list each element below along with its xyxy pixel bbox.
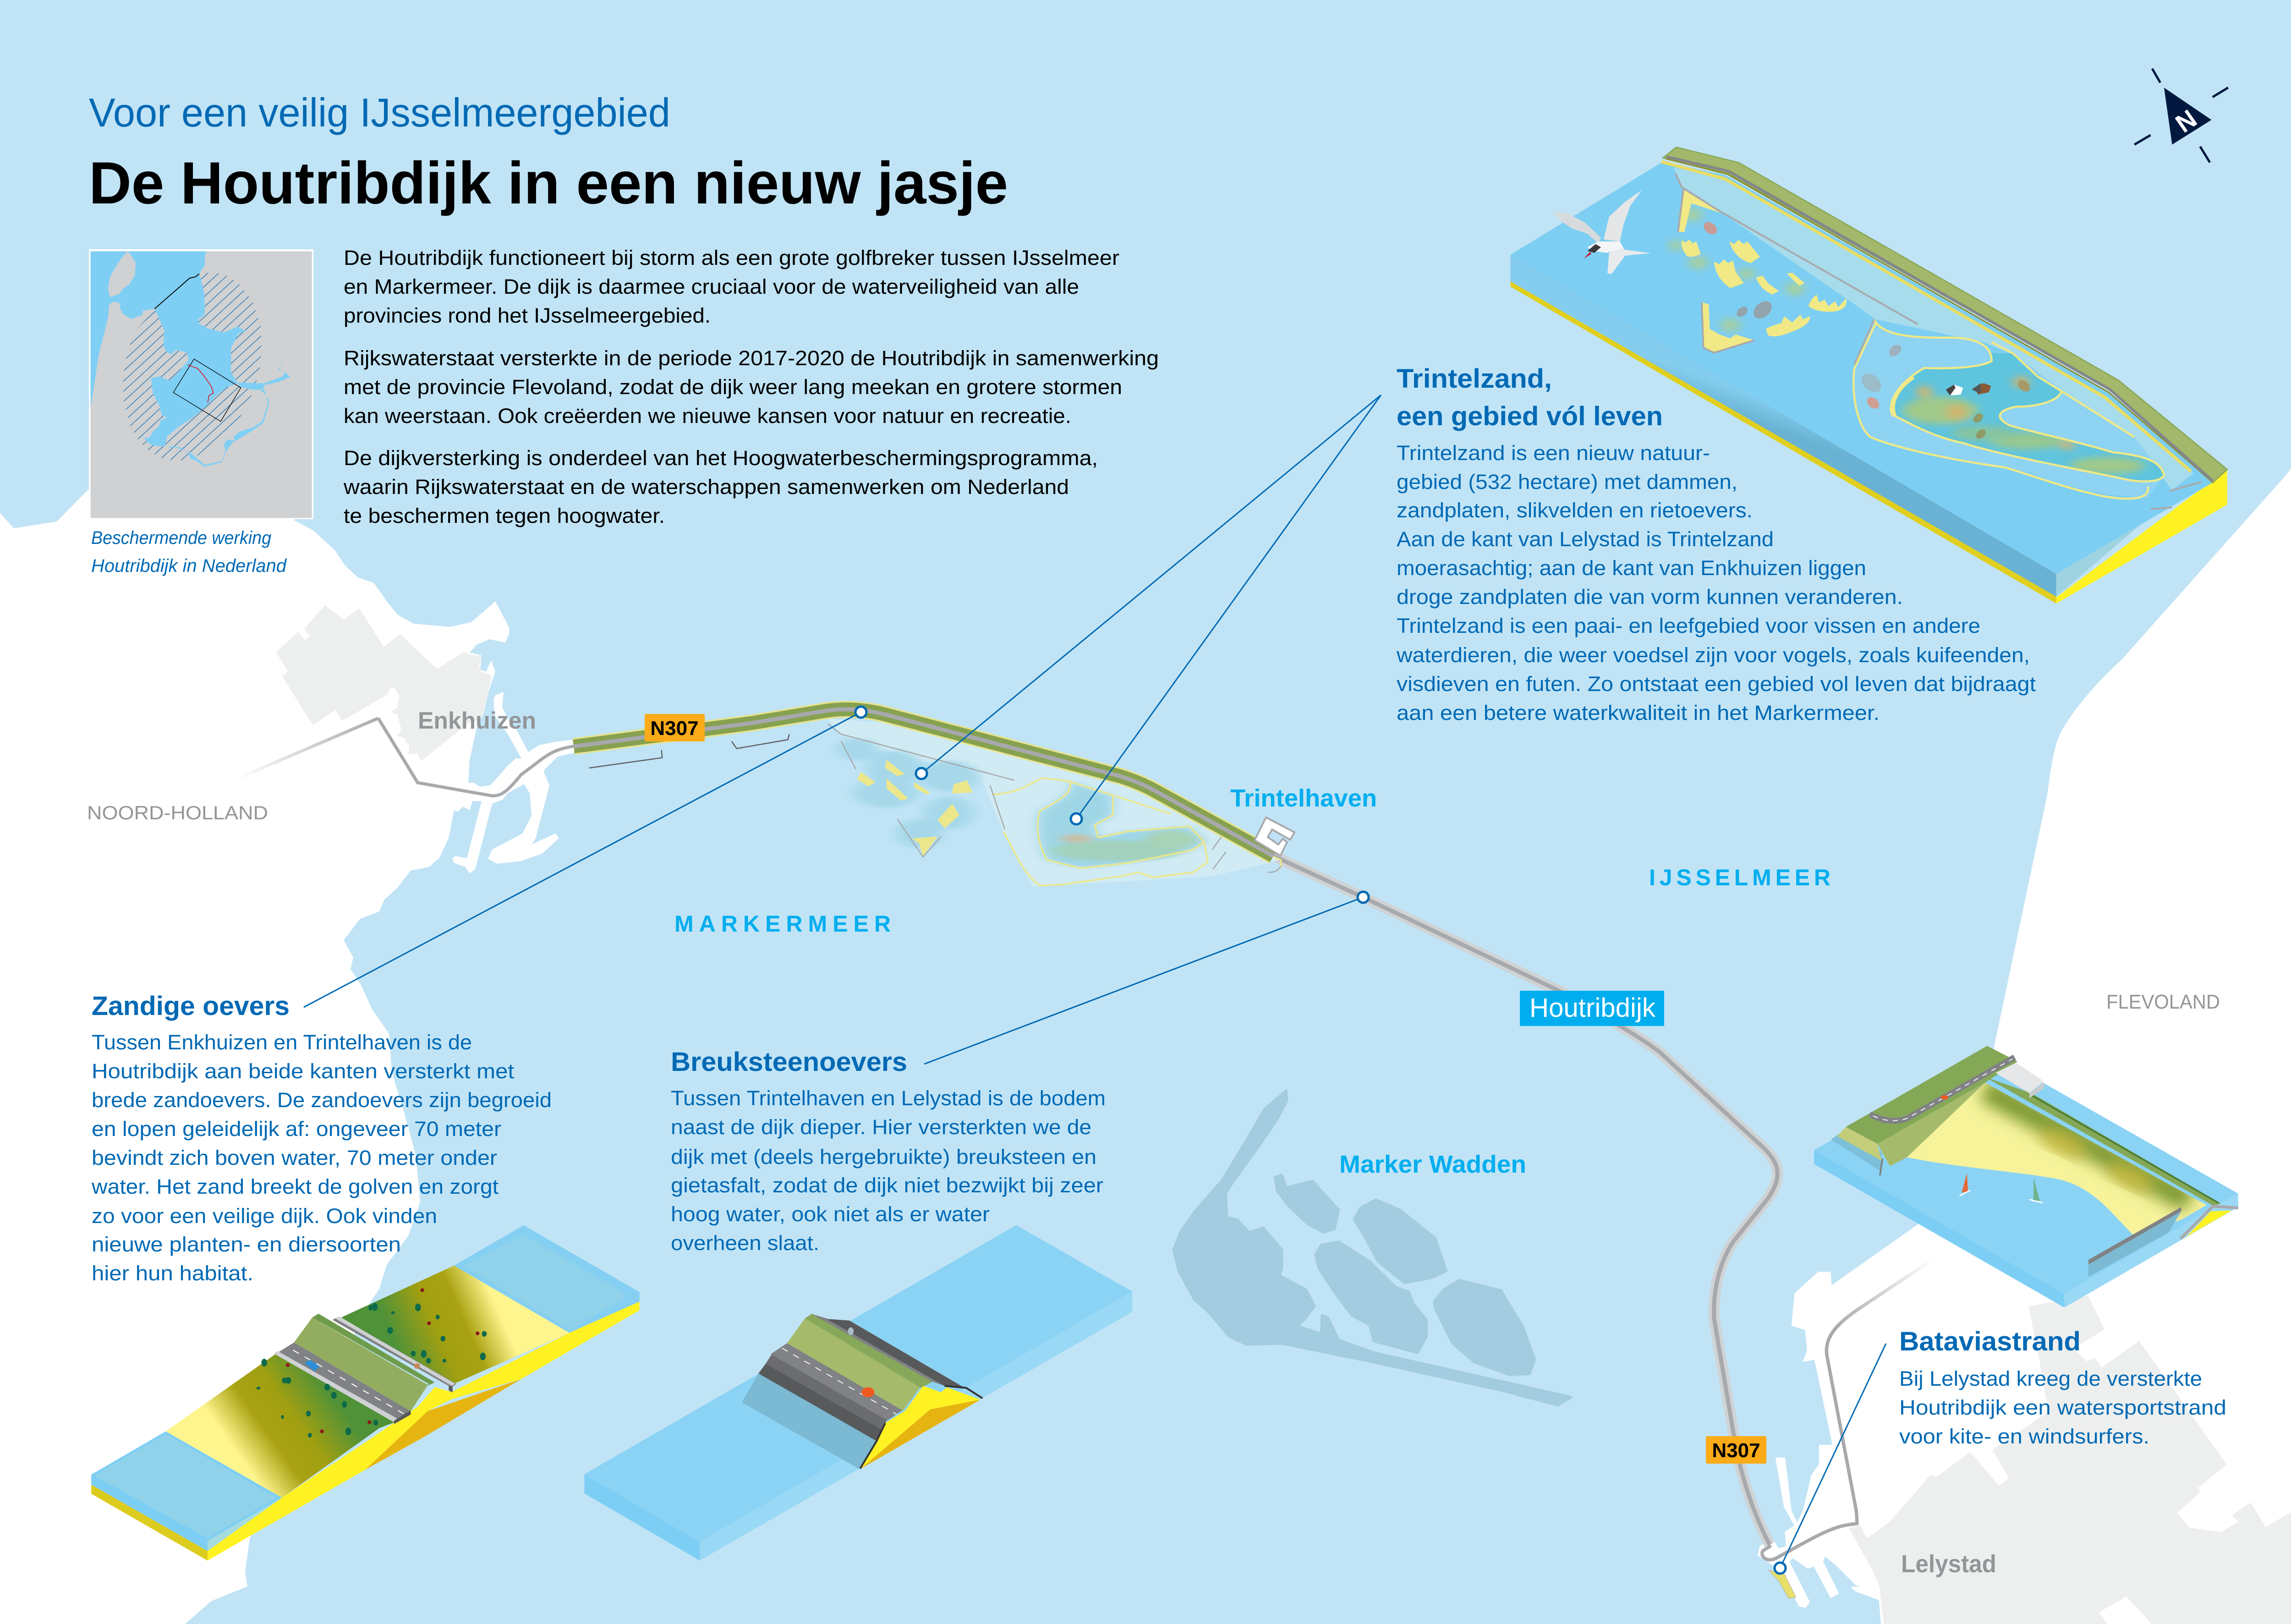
panel: Zandige oevers text: nieuwe planten- en diersoorten [92, 1233, 401, 1256]
inset hatching [123, 273, 262, 460]
label: Markermeer: MARKERMEER [674, 911, 891, 937]
panel: Breuksteenoevers text: overheen slaat. [671, 1231, 819, 1255]
intro text: De Houtribdijk functioneert bij storm als een grote golfbreker tussen IJsselmeer [344, 246, 1119, 269]
dike [1663, 147, 2227, 483]
label: Houtribdijk: Houtribdijk [1529, 993, 1656, 1023]
pale shallow zone [1674, 167, 2194, 490]
cyclist [848, 1328, 854, 1335]
end cut [1880, 1158, 2238, 1239]
intro text: waarin Rijkswaterstaat en de waterschappen samenwerken om Nederland [343, 475, 1069, 499]
map: Houtribdijk road [574, 709, 1777, 1545]
panel: Breuksteenoevers text: gietasfalt, zodat de dijk niet bezwijkt bij zeer [671, 1174, 1103, 1197]
underwater patches [1669, 208, 1805, 332]
beach: Bataviastrand on map [1769, 1570, 1796, 1598]
land: Noord-Holland [0, 458, 574, 1624]
dike [1837, 1046, 2221, 1205]
intro text: De dijkversterking is onderdeel van het Hoogwaterbeschermingsprogramma, [344, 446, 1098, 470]
far road [812, 1314, 945, 1386]
panel: Breuksteenoevers text [671, 1047, 1106, 1255]
panel: Breuksteenoevers text: hoog water, ook niet als er water [671, 1202, 990, 1226]
sand islands [1678, 189, 1847, 353]
panel: Zandige oevers text: water. Het zand breekt de golven en zorgt [91, 1175, 499, 1198]
dams and sand banks [1853, 319, 2164, 499]
leader lines [304, 395, 1886, 1568]
panel: Trintelzand text: Trintelzand, [1397, 364, 1552, 394]
panel: Zandige oevers text: zo voor een veilige dijk. Ook vinden [92, 1204, 437, 1228]
Trintelzand mini map [589, 719, 1281, 887]
label: Lelystad: Lelystad [1901, 1550, 1996, 1578]
map: Trintelhaven harbour [1255, 817, 1294, 856]
water slab [1814, 1051, 2238, 1307]
panel: Trintelzand text: een gebied vól leven [1397, 401, 1663, 431]
panel: Zandige oevers text: brede zandoevers. De zandoevers zijn begroeid [92, 1088, 552, 1112]
rock revetment [758, 1353, 888, 1441]
shrubs [257, 1303, 487, 1437]
panel: Breuksteenoevers text: naast de dijk dieper. Hier versterkten we de [671, 1115, 1091, 1139]
panel: Trintelzand text: zandplaten, slikvelden en rietoevers. [1397, 499, 1753, 522]
subtitle: Voor een veilig IJsselmeergebied [89, 90, 670, 135]
panel: Bataviastrand text: Bij Lelystad kreeg de versterkte [1899, 1367, 2202, 1390]
car [861, 1387, 874, 1397]
parking area [1995, 1063, 2044, 1098]
panel: Bataviastrand block diagram [1814, 1046, 2238, 1307]
land: Flevoland [1919, 433, 2291, 1224]
car [305, 1360, 319, 1372]
label: N307 bottom [1706, 1436, 1766, 1464]
inset water [91, 251, 290, 466]
label: N307 top [645, 714, 705, 741]
intro text: met de provincie Flevoland, zodat de dijk weer lang meekan en grotere stormen [344, 375, 1122, 399]
label: Marker Wadden: Marker Wadden [1339, 1151, 1526, 1178]
label: Trintelhaven: Trintelhaven [1230, 785, 1377, 812]
panel: Trintelzand text: waterdieren, die weer voedsel zijn voor vogels, zoals kuifeenden, [1396, 643, 2030, 667]
dike body [294, 1317, 428, 1411]
panel: Zandige oevers text: Houtribdijk aan beide kanten versterkt met [92, 1059, 515, 1083]
water and sides [91, 1225, 640, 1561]
inset island Texel [108, 251, 136, 297]
beach [1907, 1082, 2207, 1234]
panel: Bataviastrand text: Houtribdijk een watersportstrand [1899, 1396, 2226, 1419]
panel: Trintelzand text: Aan de kant van Lelystad is Trintelzand [1397, 527, 1774, 551]
title: De Houtribdijk in een nieuw jasje [89, 149, 1008, 216]
panel: Trintelzand text [1396, 364, 2036, 724]
panel: Zandige oevers text: hier hun habitat. [92, 1262, 253, 1285]
car [1940, 1095, 1948, 1099]
label: Enkhuizen: Enkhuizen [418, 708, 536, 734]
dike green section [574, 709, 1273, 856]
panel: Breuksteenoevers text: dijk met (deels hergebruikte) breuksteen en [671, 1145, 1096, 1169]
urban area: Lelystad [1849, 1296, 2291, 1624]
compass: N [2170, 104, 2202, 138]
panel: Zandige oevers text: Zandige oevers [92, 991, 290, 1021]
panel: Zandige oevers text: Tussen Enkhuizen en Trintelhaven is de [92, 1031, 472, 1054]
panel: Trintelzand text: Trintelzand is een nieuw natuur- [1397, 441, 1710, 465]
panel: Breuksteenoevers text: Tussen Trintelhaven en Lelystad is de bodem [671, 1086, 1106, 1110]
water slab [584, 1225, 1132, 1560]
label: N307 bottom: N307 [1712, 1439, 1760, 1462]
dike grass [787, 1318, 921, 1411]
marsh island [1895, 353, 2163, 480]
intro text: kan weerstaan. Ook creëerden we nieuwe kansen voor natuur en recreatie. [344, 404, 1071, 428]
ducks [1946, 383, 1991, 395]
panel: Bataviastrand text: voor kite- en windsurfers. [1899, 1425, 2149, 1448]
panel: Trintelzand text: gebied (532 hectare) met dammen, [1397, 470, 1737, 494]
tern bird [1552, 190, 1651, 274]
panel: Trintelzand text: moerasachtig; aan de kant van Enkhuizen liggen [1397, 556, 1866, 580]
label: Noord-Holland: NOORD-HOLLAND [87, 802, 268, 823]
location dots [855, 707, 1786, 1574]
intro text: Rijkswaterstaat versterkte in de periode 2017-2020 de Houtribdijk in samenwerking [344, 346, 1159, 370]
label: N307 top: N307 [650, 717, 699, 740]
inset caption [91, 528, 287, 576]
inset Houtribdijk red line [188, 365, 214, 403]
intro text: provincies rond het IJsselmeergebied. [344, 304, 711, 327]
sand core [861, 1400, 981, 1469]
label: IJsselmeer: IJSSELMEER [1649, 865, 1831, 890]
label: Flevoland: FLEVOLAND [2106, 991, 2220, 1013]
panel: Zandige oevers text: bevindt zich boven water, 70 meter onder [92, 1146, 497, 1169]
windsurfers [1960, 1173, 2043, 1203]
fish [1701, 220, 2033, 440]
shallow front [1831, 1129, 1882, 1171]
panel: Zandige oevers text: en lopen geleidelijk af: ongeveer 70 meter [92, 1117, 501, 1141]
map: Marker Wadden islands [1173, 1091, 1571, 1405]
panel: Bataviastrand text [1899, 1327, 2226, 1448]
breakwater [2088, 1207, 2181, 1277]
panel: Trintelzand text: Trintelzand is een paai- en leefgebied voor vissen en andere [1397, 614, 1980, 637]
panel: Bataviastrand text: Bataviastrand [1899, 1327, 2081, 1356]
block sides [1510, 255, 2227, 604]
panel: Trintelzand text: droge zandplaten die van vorm kunnen veranderen. [1397, 585, 1903, 609]
road: Lelystad approach [1762, 1260, 1932, 1560]
panel: Breuksteenoevers block diagram [584, 1225, 1132, 1560]
gray dam line [1675, 173, 2202, 509]
panel: Trintelzand text: visdieven en futen. Zo ontstaat een gebied vol leven dat bijdraagt [1397, 672, 2036, 696]
panel: Breuksteenoevers text: Breuksteenoevers [671, 1047, 907, 1077]
water surface [1510, 162, 2213, 574]
road: Enkhuizen approach [237, 718, 576, 796]
cyclist [414, 1363, 420, 1369]
beach faces [166, 1354, 395, 1498]
inset caption: Beschermende werking [91, 528, 271, 548]
panel: Zandige oevers text [91, 991, 552, 1285]
inset caption: Houtribdijk in Nederland [91, 556, 287, 576]
panel: Zandige oevers block diagram [91, 1225, 640, 1561]
land: Lelystad harbour [1759, 1224, 2291, 1624]
road [771, 1343, 903, 1421]
intro text: te beschermen tegen hoogwater. [344, 504, 665, 527]
intro text: en Markermeer. De dijk is daarmee cruciaal voor de waterveiligheid van alle [344, 275, 1079, 298]
inset map: protective effect [89, 249, 313, 519]
inset Afsluitdijk and map frame [154, 274, 241, 422]
panel: Trintelzand block diagram [1510, 147, 2227, 604]
compass [2134, 69, 2228, 163]
road [274, 1343, 411, 1424]
road [1870, 1057, 2015, 1121]
cycle path [333, 1317, 456, 1393]
urban area: Enkhuizen [276, 605, 492, 761]
sand base [365, 1379, 521, 1470]
panel: Trintelzand text: aan een betere waterkwaliteit in het Markermeer. [1397, 701, 1880, 724]
intro text [343, 246, 1159, 527]
